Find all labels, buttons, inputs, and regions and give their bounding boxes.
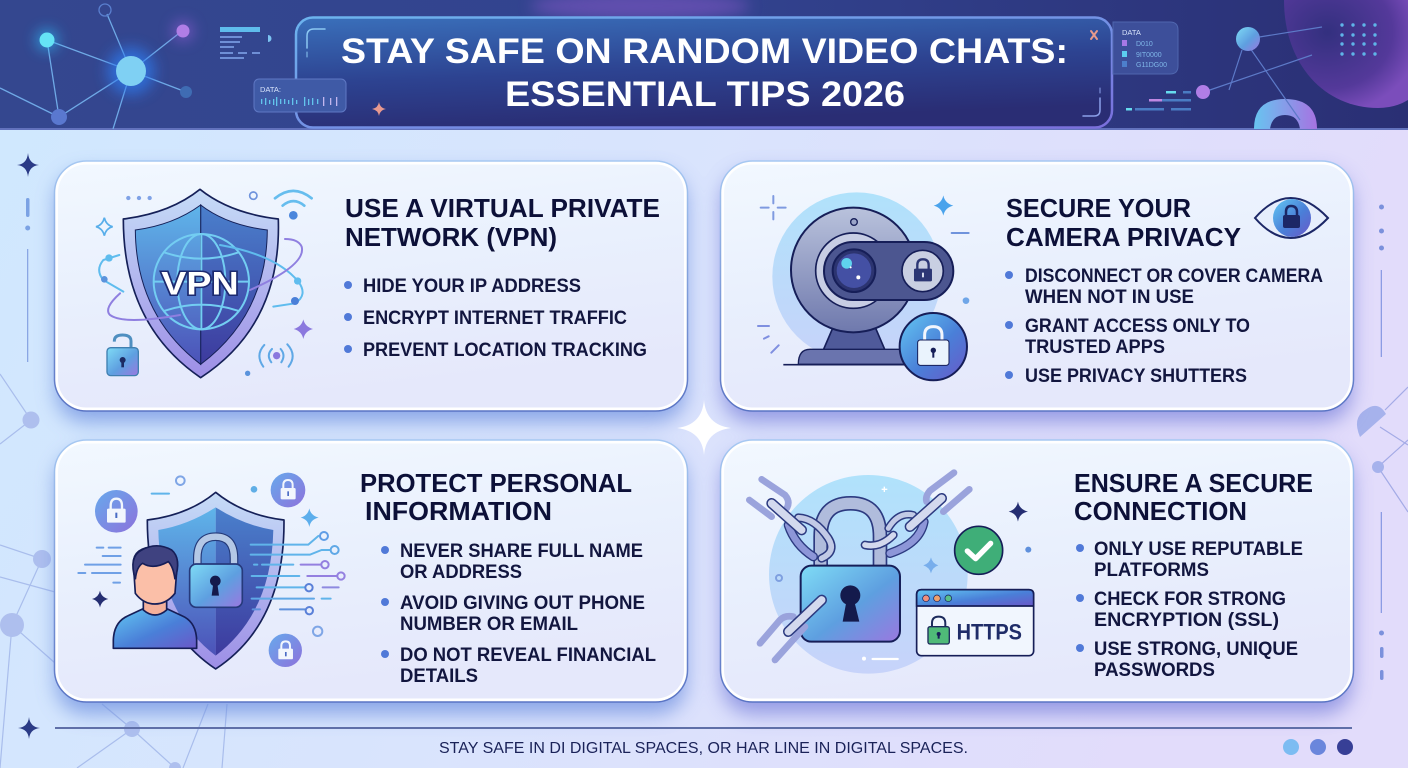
bullet list: HIDE YOUR IP ADDRESS <box>363 275 581 297</box>
bullet list: NUMBER OR EMAIL <box>400 613 578 635</box>
lock badge <box>95 490 138 533</box>
code lines right <box>1126 91 1191 110</box>
data chip right: D010 <box>1136 41 1153 48</box>
bullet list <box>1076 538 1303 681</box>
bullet list: GRANT ACCESS ONLY TO <box>1025 315 1250 337</box>
data chip left: DATA: <box>260 85 281 94</box>
bullet list <box>1005 265 1323 387</box>
title text <box>341 32 1068 114</box>
lock badge <box>271 473 305 507</box>
heading: SECURE YOUR <box>1006 193 1191 223</box>
data chip right <box>1113 22 1178 74</box>
bullet list: WHEN NOT IN USE <box>1025 286 1194 308</box>
footer text: STAY SAFE IN DI DIGITAL SPACES, OR HAR LINE IN DIGITAL SPACES. <box>439 740 968 757</box>
decorative glow <box>530 0 750 20</box>
bullet list: PASSWORDS <box>1094 659 1215 681</box>
bullet list: ONLY USE REPUTABLE <box>1094 538 1303 560</box>
decorative ring <box>1254 99 1317 129</box>
heading <box>1074 468 1313 526</box>
lock badge <box>269 634 302 667</box>
dot grid <box>1340 23 1377 56</box>
bullet list: NEVER SHARE FULL NAME <box>400 540 643 562</box>
heading <box>1006 193 1241 252</box>
chain links <box>772 498 942 558</box>
heading: PROTECT PERSONAL <box>360 468 632 498</box>
code lines left <box>220 27 272 59</box>
heading <box>360 468 632 526</box>
panel: camera privacy <box>720 161 1354 411</box>
footer dots <box>1283 739 1353 755</box>
icon: person with shield and lock <box>78 473 345 669</box>
heading: USE A VIRTUAL PRIVATE <box>345 193 660 223</box>
side decorations left <box>17 153 39 362</box>
icon: padlock with chains and HTTPS <box>749 473 1034 674</box>
browser window <box>917 590 1034 656</box>
data chip right: 9IT0000 <box>1136 52 1162 59</box>
decorative orb top right <box>1284 0 1408 108</box>
icon: eye with lock <box>1255 198 1328 238</box>
bullet list: PLATFORMS <box>1094 559 1209 581</box>
card shadows <box>56 172 1352 714</box>
heading: CONNECTION <box>1074 496 1247 526</box>
bullet list: DETAILS <box>400 665 478 687</box>
bullet list: DO NOT REVEAL FINANCIAL <box>400 644 656 666</box>
heading: NETWORK (VPN) <box>345 222 557 252</box>
bullet list: PREVENT LOCATION TRACKING <box>363 339 647 361</box>
heading: INFORMATION <box>365 496 552 526</box>
icon: VPN shield <box>96 189 313 378</box>
center sparkle <box>677 400 731 455</box>
background network pattern left <box>0 374 227 768</box>
bullet list: AVOID GIVING OUT PHONE <box>400 592 645 614</box>
bullet list: USE PRIVACY SHUTTERS <box>1025 365 1247 387</box>
panel: secure connection <box>720 440 1354 702</box>
title text: ESSENTIAL TIPS 2026 <box>505 75 905 114</box>
title corner marks <box>307 29 1100 116</box>
browser window: HTTPS <box>957 619 1022 644</box>
shackle <box>821 503 880 567</box>
title box <box>296 18 1112 128</box>
bullet list <box>344 275 647 361</box>
footer star <box>18 717 40 739</box>
data chip right: G11DG00 <box>1136 62 1167 69</box>
bullet list: ENCRYPT INTERNET TRAFFIC <box>363 307 627 329</box>
network graph left <box>0 4 194 129</box>
sparkle <box>372 102 386 116</box>
data chip left <box>254 79 346 112</box>
bullet list: TRUSTED APPS <box>1025 336 1165 358</box>
bullet list: CHECK FOR STRONG <box>1094 588 1286 610</box>
heading: ENSURE A SECURE <box>1074 468 1313 498</box>
bullet list: USE STRONG, UNIQUE <box>1094 638 1298 660</box>
title text: STAY SAFE ON RANDOM VIDEO CHATS: <box>341 32 1068 71</box>
data chip right: DATA <box>1122 28 1141 37</box>
footer <box>18 717 1353 757</box>
network graph right <box>1196 27 1322 120</box>
background network pattern right <box>1357 387 1408 512</box>
bullet list: ENCRYPTION (SSL) <box>1094 609 1279 631</box>
check badge <box>955 526 1003 574</box>
bullet list: OR ADDRESS <box>400 561 522 583</box>
bullet list: DISCONNECT OR COVER CAMERA <box>1025 265 1323 287</box>
panel: personal information <box>54 440 688 702</box>
header banner <box>0 0 1408 130</box>
panel: use a VPN <box>54 161 688 411</box>
far chain strands <box>749 473 969 517</box>
icon: VPN shield: VPN <box>161 265 239 301</box>
lower chain <box>760 600 822 660</box>
icon: webcam <box>758 192 969 380</box>
heading <box>345 193 660 252</box>
side decorations right <box>1379 204 1384 680</box>
bullet list <box>381 540 656 687</box>
heading: CAMERA PRIVACY <box>1006 222 1241 252</box>
